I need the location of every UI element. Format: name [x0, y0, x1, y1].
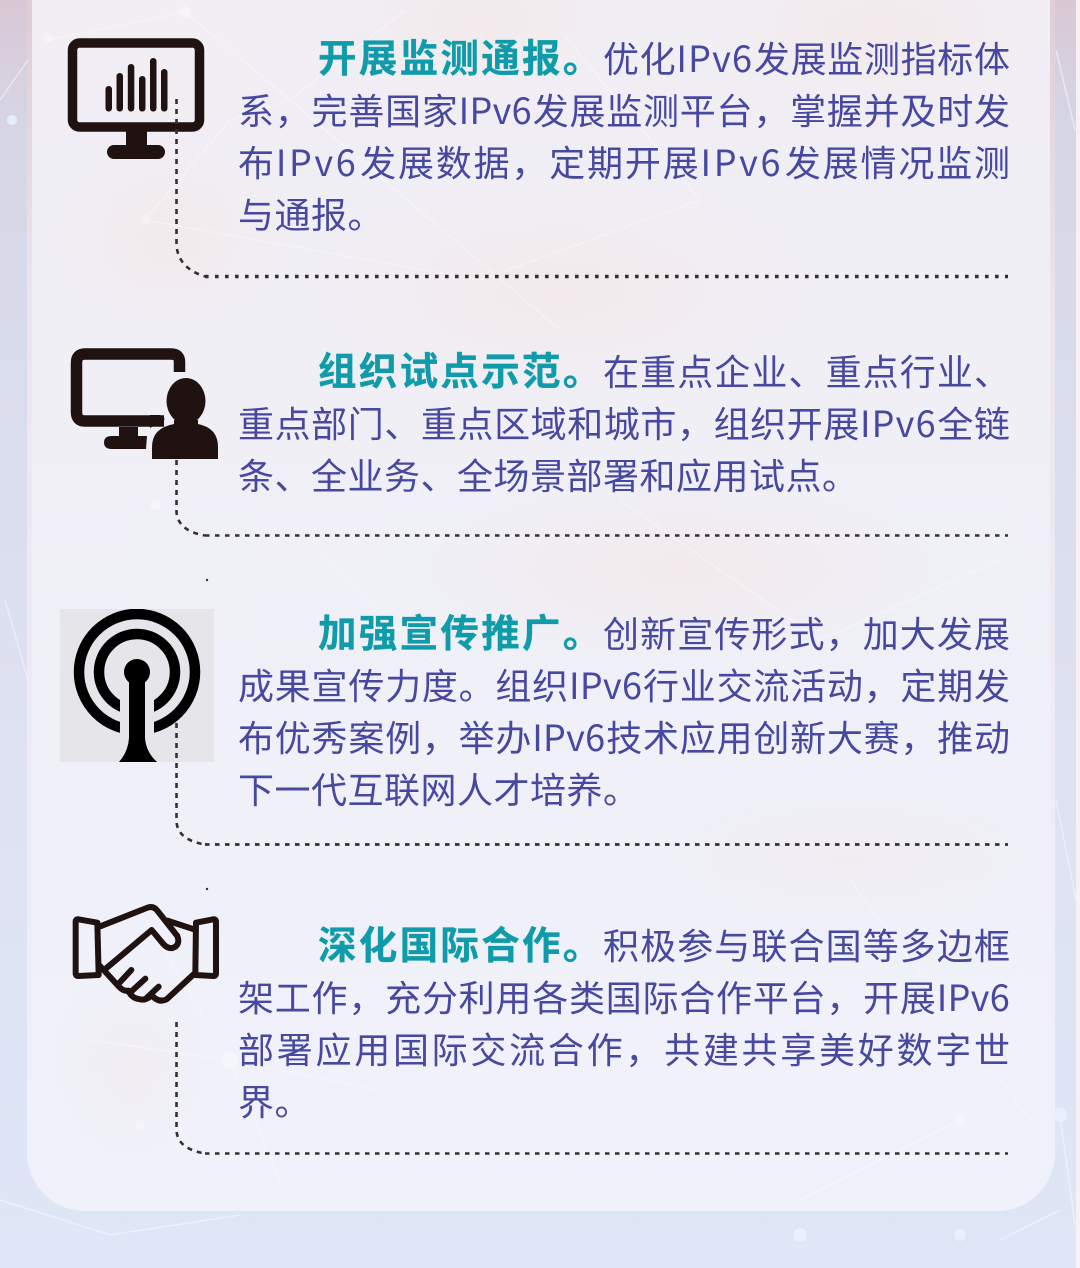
- dotted connector 2: [175, 460, 1008, 537]
- text block 2: [238, 341, 1010, 500]
- text block 4: 部署应用国际交流合作，共建共享美好数字世: [238, 1022, 1010, 1074]
- text block 2: 重点部门、重点区域和城市，组织开展IPv6全链: [238, 396, 1010, 448]
- text block 2: 组织试点示范。: [318, 341, 604, 397]
- text block 4: 深化国际合作。: [318, 915, 604, 971]
- section 4: international cooperation: [72, 888, 1008, 1155]
- icon: monitor with bar chart: [68, 38, 204, 159]
- text block 4: 架工作，充分利用各类国际合作平台，开展IPv6: [238, 970, 1010, 1022]
- text block 2: 条、全业务、全场景部署和应用试点。: [238, 448, 859, 500]
- marker dot: [206, 578, 208, 582]
- text block 3: 布优秀案例，举办IPv6技术应用创新大赛，推动: [238, 710, 1010, 762]
- text block 3: 加强宣传推广。: [318, 603, 604, 659]
- text block 1: 优化IPv6发展监测指标体: [603, 31, 1010, 83]
- text block 3: [238, 603, 1010, 814]
- text block 1: 系，完善国家IPv6发展监测平台，掌握并及时发: [238, 83, 1010, 135]
- text block 4: 积极参与联合国等多边框: [603, 918, 1010, 970]
- dotted connector 3: [175, 723, 1008, 846]
- dotted connector 1: [175, 99, 1008, 278]
- text block 4: [238, 915, 1010, 1126]
- text block 3: 成果宣传力度。组织IPv6行业交流活动，定期发: [238, 658, 1010, 710]
- icon: handshake: [72, 904, 219, 1004]
- text block 2: 在重点企业、重点行业、: [603, 344, 1010, 396]
- text block 1: [238, 28, 1010, 239]
- section 1: monitoring and reporting: [68, 38, 1008, 278]
- icon: monitor with person: [70, 348, 218, 459]
- dotted connector 4: [175, 1022, 1008, 1155]
- text block 1: 开展监测通报。: [318, 28, 604, 84]
- text block 1: 与通报。: [238, 187, 384, 239]
- text block 1: 布IPv6发展数据，定期开展IPv6发展情况监测: [238, 135, 1010, 187]
- section 3: publicity: [60, 578, 1008, 846]
- section 2: pilot demonstration: [70, 348, 1008, 537]
- icon: broadcast antenna: [60, 609, 214, 762]
- text block 3: 下一代互联网人才培养。: [238, 762, 640, 814]
- marker dot: [206, 888, 208, 890]
- text block 4: 界。: [238, 1074, 311, 1126]
- text block 3: 创新宣传形式，加大发展: [603, 606, 1010, 658]
